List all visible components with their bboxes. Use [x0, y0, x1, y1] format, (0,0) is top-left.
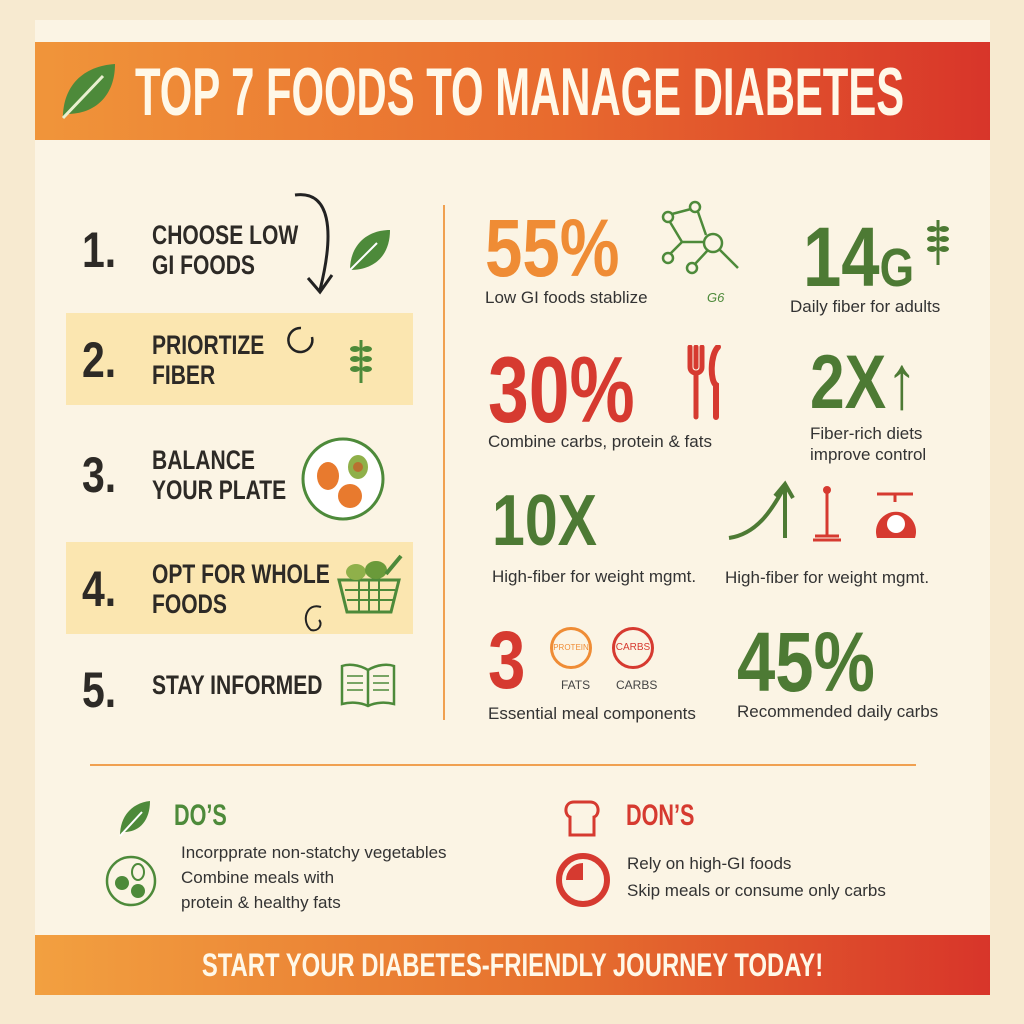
step 3: 3. — [82, 447, 116, 503]
panel: don'ts: Rely on high-GI foods — [627, 854, 791, 873]
stat 55%: 55% — [485, 203, 620, 294]
stat 3 meal components: CARBS — [616, 678, 657, 692]
stat 3 meal components: CARBS — [616, 642, 650, 653]
stat 3 meal components: FATS — [561, 678, 590, 692]
stat 14G — [790, 210, 949, 316]
header bar — [35, 42, 990, 140]
step 2: PRIORTIZE — [152, 330, 264, 360]
panel: stats — [485, 200, 949, 723]
icon: leaf — [62, 64, 115, 119]
arrow: curved — [294, 193, 334, 294]
stat 55%: Low GI foods stablize — [485, 288, 648, 307]
stat 3 meal components — [488, 615, 696, 723]
stat 2X — [810, 340, 926, 464]
stat 30%: Combine carbs, protein & fats — [488, 432, 712, 451]
stat 2X: improve control — [810, 445, 926, 464]
panel: don'ts: DON’S — [626, 799, 694, 832]
step 1: 1. — [82, 222, 116, 278]
step 1 — [82, 220, 390, 280]
step 2 — [66, 313, 413, 405]
step 2: FIBER — [152, 360, 215, 390]
divider vertical — [443, 205, 445, 720]
panel: do's: DO’S — [174, 799, 227, 832]
divider horizontal — [90, 764, 916, 766]
footer bar — [35, 935, 990, 995]
title: TOP 7 FOODS TO MANAGE DIABETES — [135, 54, 904, 130]
panel: do's: protein & healthy fats — [181, 893, 341, 912]
stat 10X: 10X — [492, 481, 597, 561]
stat 2X: Fiber-rich diets — [810, 424, 922, 443]
step 3: BALANCE — [152, 445, 255, 475]
stat 14G: Daily fiber for adults — [790, 297, 940, 316]
stat 55%: G6 — [707, 290, 724, 305]
footer text: START YOUR DIABETES-FRIENDLY JOURNEY TODAY! — [202, 947, 823, 983]
stat 3 meal components: Essential meal components — [488, 704, 696, 723]
step 4 — [66, 542, 413, 634]
step 3 — [82, 438, 384, 520]
panel: do's — [106, 799, 447, 912]
panel: don'ts — [556, 799, 886, 907]
stat 3 meal components: PROTEIN — [553, 643, 589, 652]
stat 10X: High-fiber for weight mgmt. — [492, 567, 696, 586]
step 5: STAY INFORMED — [152, 670, 322, 700]
panel: do's: Combine meals with — [181, 868, 334, 887]
stat 3 meal components: 3 — [488, 615, 525, 706]
panel: do's: Incorpprate non-statchy vegetables — [181, 843, 447, 862]
step 2: 2. — [82, 332, 116, 388]
panel: steps list — [66, 193, 413, 718]
icons: growth arrow, weight, scale — [725, 480, 929, 587]
step 3: YOUR PLATE — [152, 475, 286, 505]
stat 2X: 2X↑ — [810, 340, 917, 425]
stat 30% — [488, 337, 721, 451]
step 5 — [82, 662, 396, 718]
stat 30%: 30% — [488, 337, 635, 442]
step 1: CHOOSE LOW — [152, 220, 298, 250]
panel: don'ts: Skip meals or consume only carbs — [627, 881, 886, 900]
stat 55% — [485, 200, 739, 307]
step 4: 4. — [82, 561, 116, 617]
stat 45% — [737, 615, 938, 721]
stat 14G: 14G — [803, 210, 914, 304]
stat 10X — [492, 481, 696, 586]
step 1: GI FOODS — [152, 250, 255, 280]
step 5: 5. — [82, 662, 116, 718]
stat 45%: 45% — [737, 615, 875, 709]
stat 45%: Recommended daily carbs — [737, 702, 938, 721]
step 4: FOODS — [152, 589, 227, 619]
step 4: OPT FOR WHOLE — [152, 559, 330, 589]
icons: growth arrow, weight, scale: High-fiber for weight mgmt. — [725, 568, 929, 587]
